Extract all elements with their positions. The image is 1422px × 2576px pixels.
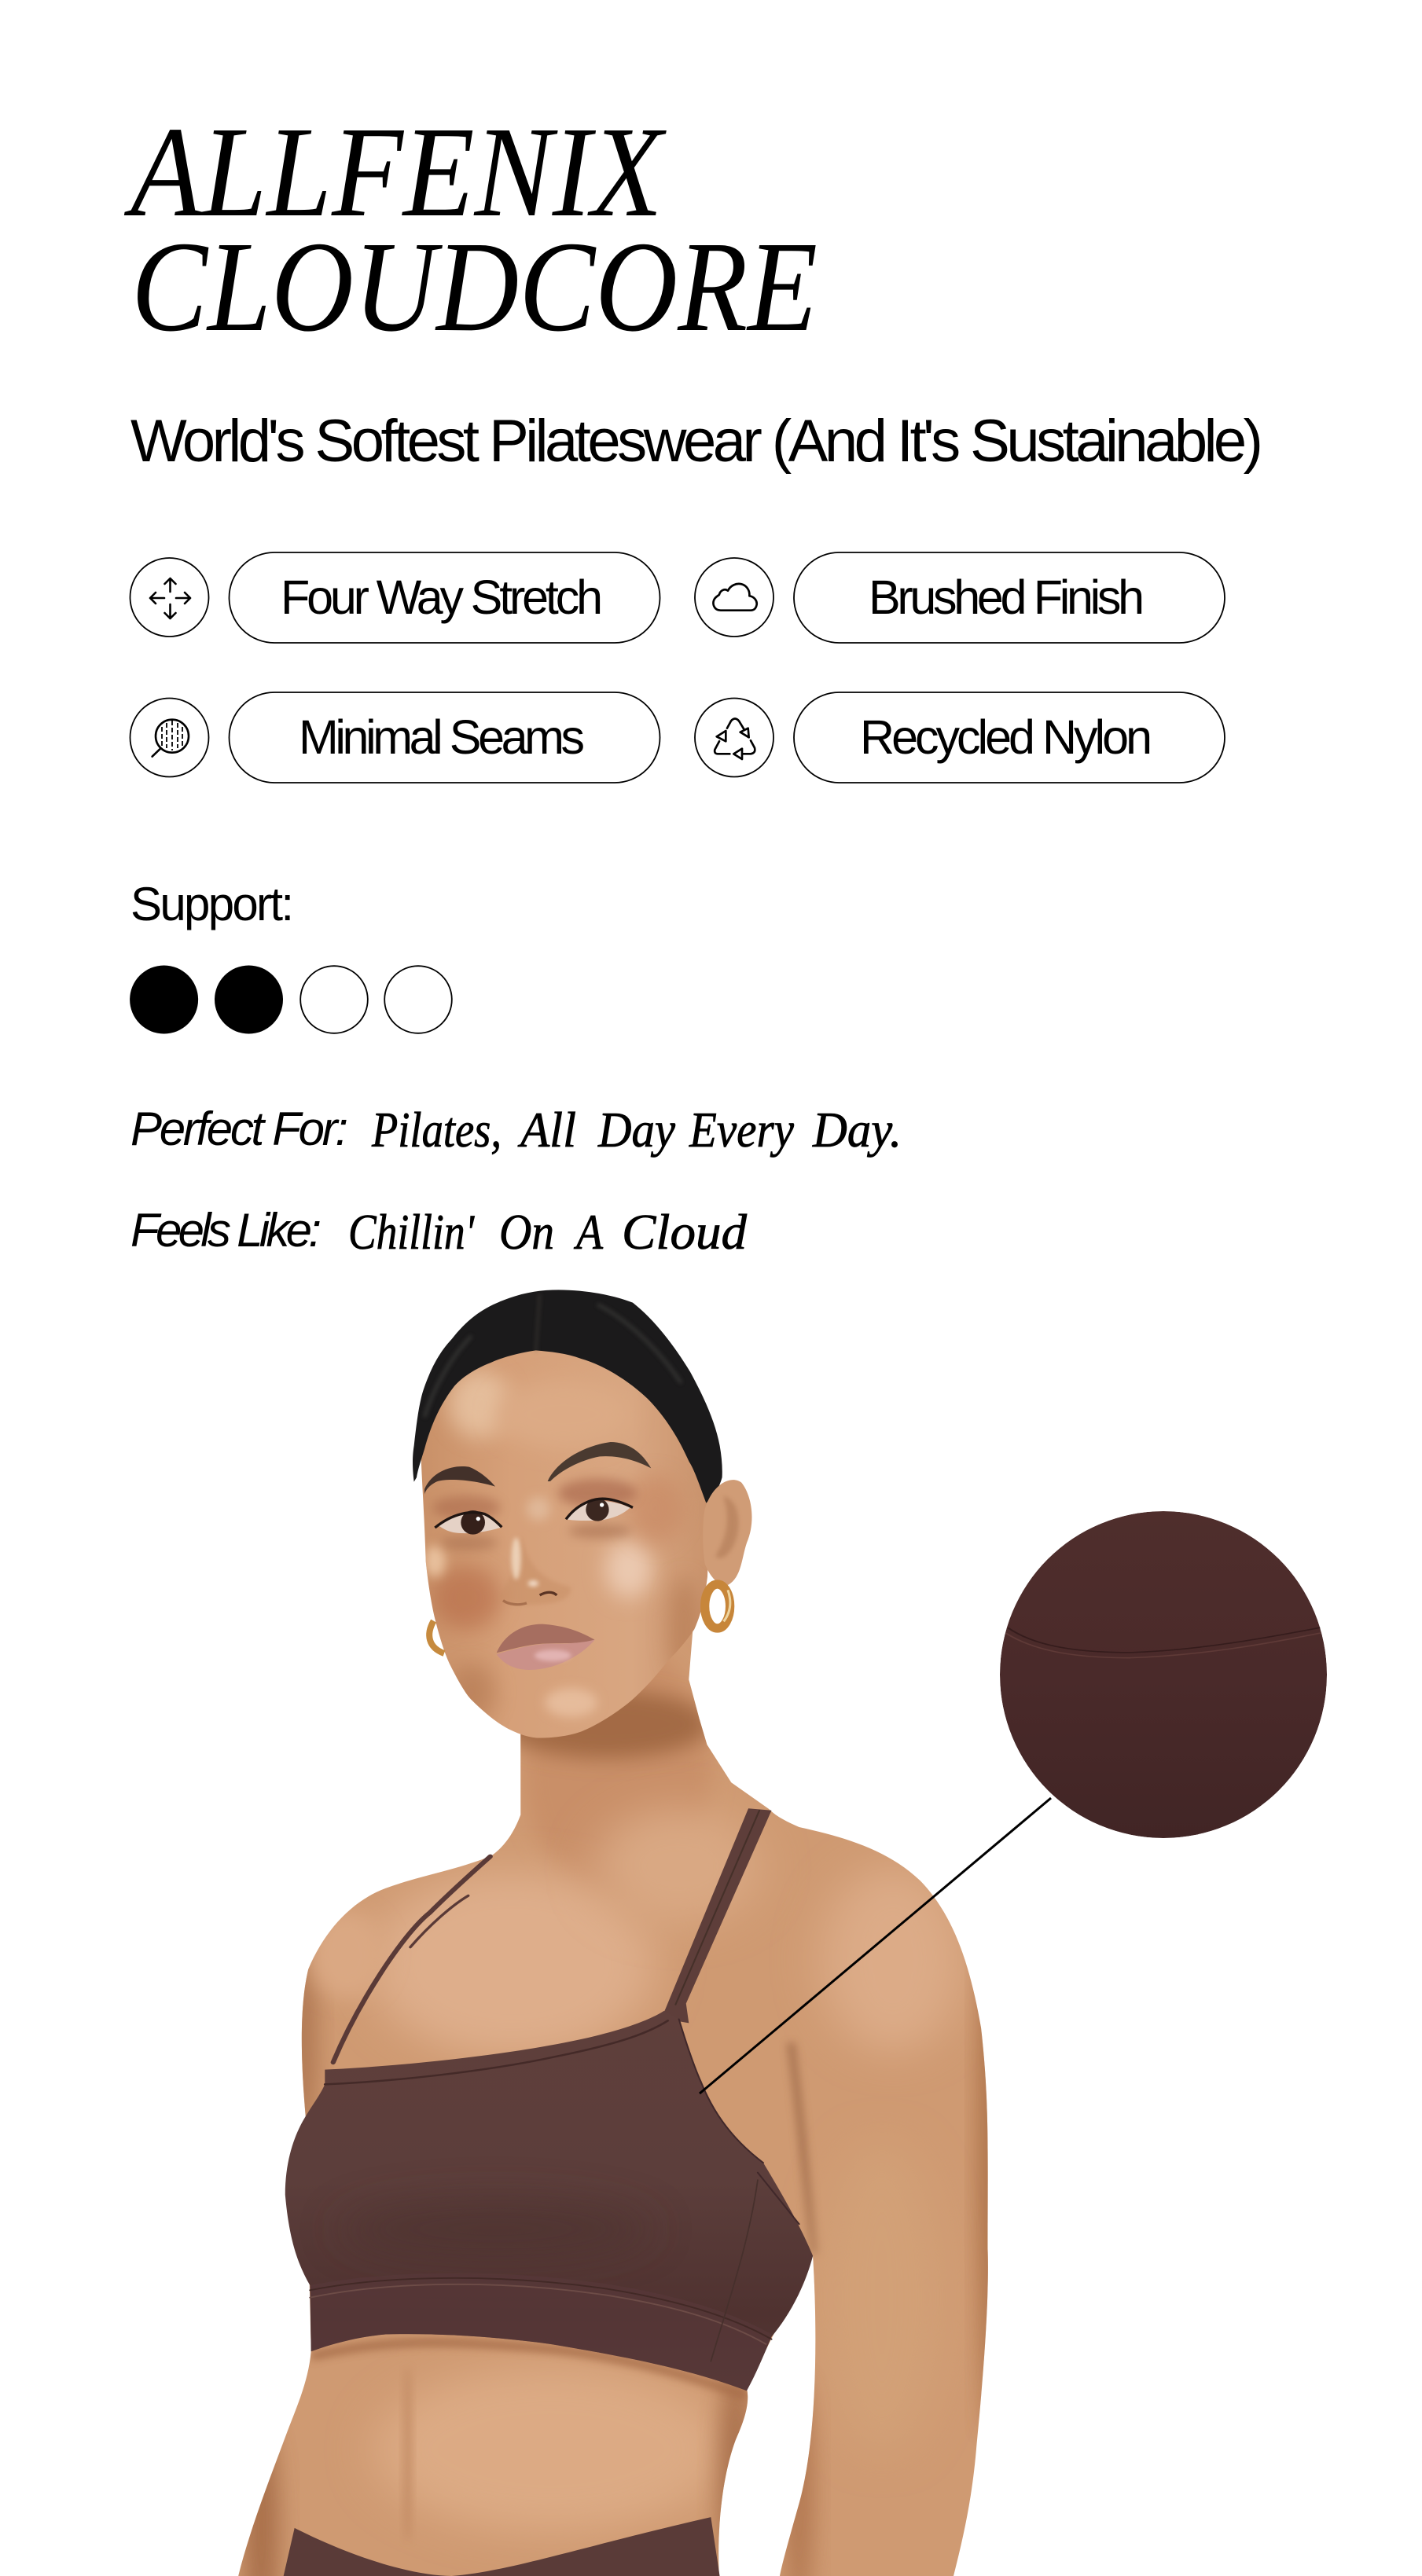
pill: recycled nylon	[794, 692, 1225, 783]
eye sockets	[432, 1495, 501, 1519]
feels like line: Feels Like:	[130, 1204, 322, 1257]
pill: brushed finish	[794, 552, 1225, 643]
perfect for line: Every	[689, 1102, 795, 1158]
pill: minimal seams	[230, 692, 660, 783]
perfect for line	[130, 1102, 902, 1158]
feels like line: Cloud	[622, 1204, 748, 1260]
bra seams	[310, 1811, 799, 2361]
support label: Support:	[130, 878, 294, 930]
perfect for line: Pilates,	[371, 1102, 502, 1158]
ear	[703, 1480, 751, 1585]
subtitle: World's Softest Pilateswear (And It's Sustainable)	[130, 408, 1263, 475]
perfect for line: All	[517, 1102, 576, 1158]
pill: four way stretch	[230, 552, 660, 643]
title	[123, 100, 818, 358]
feels like line: Chillin'	[348, 1204, 475, 1260]
pill: brushed finish: Brushed Finish	[869, 571, 1145, 624]
model illustration	[193, 1290, 1327, 2576]
face	[421, 1350, 707, 1738]
pill: four way stretch: Four Way Stretch	[281, 571, 603, 624]
pill: minimal seams: Minimal Seams	[299, 710, 585, 764]
bra body	[285, 2011, 813, 2391]
nose	[498, 1535, 571, 1605]
support rating dots	[130, 965, 452, 1034]
title: CLOUDCORE	[131, 215, 818, 358]
bra shading	[341, 2200, 650, 2259]
perfect for line: Day.	[812, 1102, 902, 1158]
head	[393, 1290, 751, 1758]
hair	[413, 1290, 722, 1503]
pill: recycled nylon: Recycled Nylon	[860, 710, 1152, 764]
under-band band	[310, 2273, 772, 2391]
hair shine	[424, 1294, 682, 1417]
icon: cloud	[695, 558, 773, 637]
callout line	[700, 1798, 1051, 2093]
earring left	[429, 1621, 444, 1653]
perfect for line: Perfect For:	[130, 1103, 348, 1155]
feels like line: On	[499, 1204, 554, 1260]
feels like line: A	[574, 1204, 604, 1260]
eyes	[439, 1514, 502, 1533]
eyebrows	[424, 1466, 495, 1495]
feels like line	[130, 1204, 748, 1260]
bra left straps	[333, 1856, 491, 2062]
perfect for line: Day	[597, 1102, 676, 1158]
feature tags	[130, 552, 1225, 783]
icon: mesh magnifier	[130, 698, 209, 776]
torso and arms	[238, 1631, 988, 2576]
lips	[497, 1624, 595, 1653]
title: ALLFENIX	[123, 100, 667, 244]
swatch circle	[1000, 1511, 1327, 1838]
icon: four way stretch arrows	[130, 558, 209, 637]
bra right strap	[661, 1808, 772, 2023]
earring right	[705, 1584, 730, 1628]
shorts waistband	[284, 2517, 720, 2576]
icon: recycle triangle	[695, 698, 773, 776]
